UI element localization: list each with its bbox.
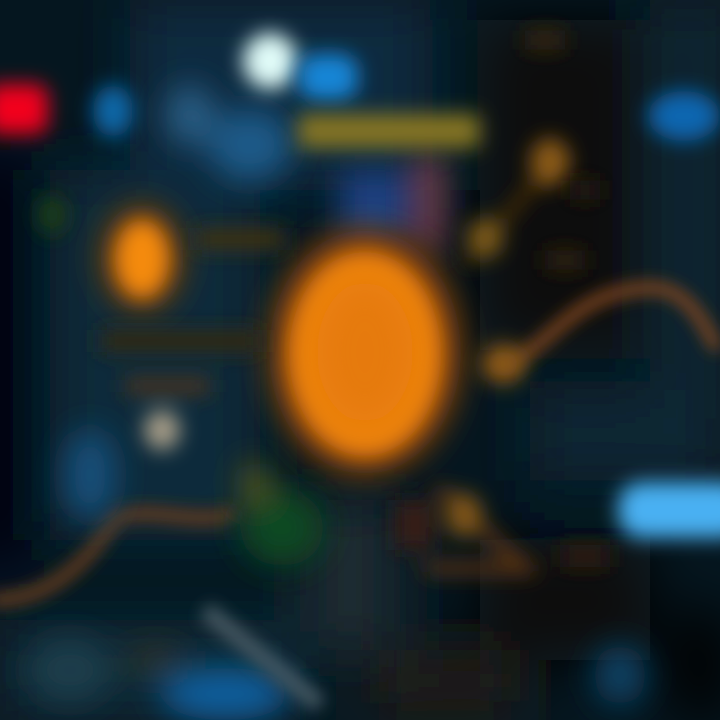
- icon: red badge: [0, 84, 48, 134]
- heading: yellow title bar: [298, 114, 480, 148]
- chart: orange line left: [0, 513, 230, 600]
- text block: faint left labels: [38, 195, 285, 450]
- panel: green block: [240, 464, 324, 566]
- panel: blue glow above coin: [340, 155, 444, 250]
- icon: small orange oval: [100, 204, 184, 312]
- arrow: grey diagonal stripe: [205, 610, 320, 705]
- icon: blue dot left: [93, 85, 133, 137]
- panel: bottom blue glow: [28, 638, 646, 720]
- panel: blue block top: [166, 85, 292, 181]
- chart: orange line right: [505, 288, 715, 365]
- icon: node right of coin: [481, 344, 525, 384]
- chart: lower right orange branch: [395, 490, 610, 570]
- text block: faint right labels: [525, 30, 600, 270]
- panel: blue block left: [64, 429, 116, 521]
- icon: blue glow top right: [648, 91, 720, 141]
- icon: white glow: [243, 33, 297, 89]
- heading: blue highlight: [298, 54, 358, 100]
- arrow: connector to upper right: [465, 138, 570, 265]
- icon: bright blue pill: [618, 482, 720, 538]
- icon: main orange coin: [269, 230, 461, 474]
